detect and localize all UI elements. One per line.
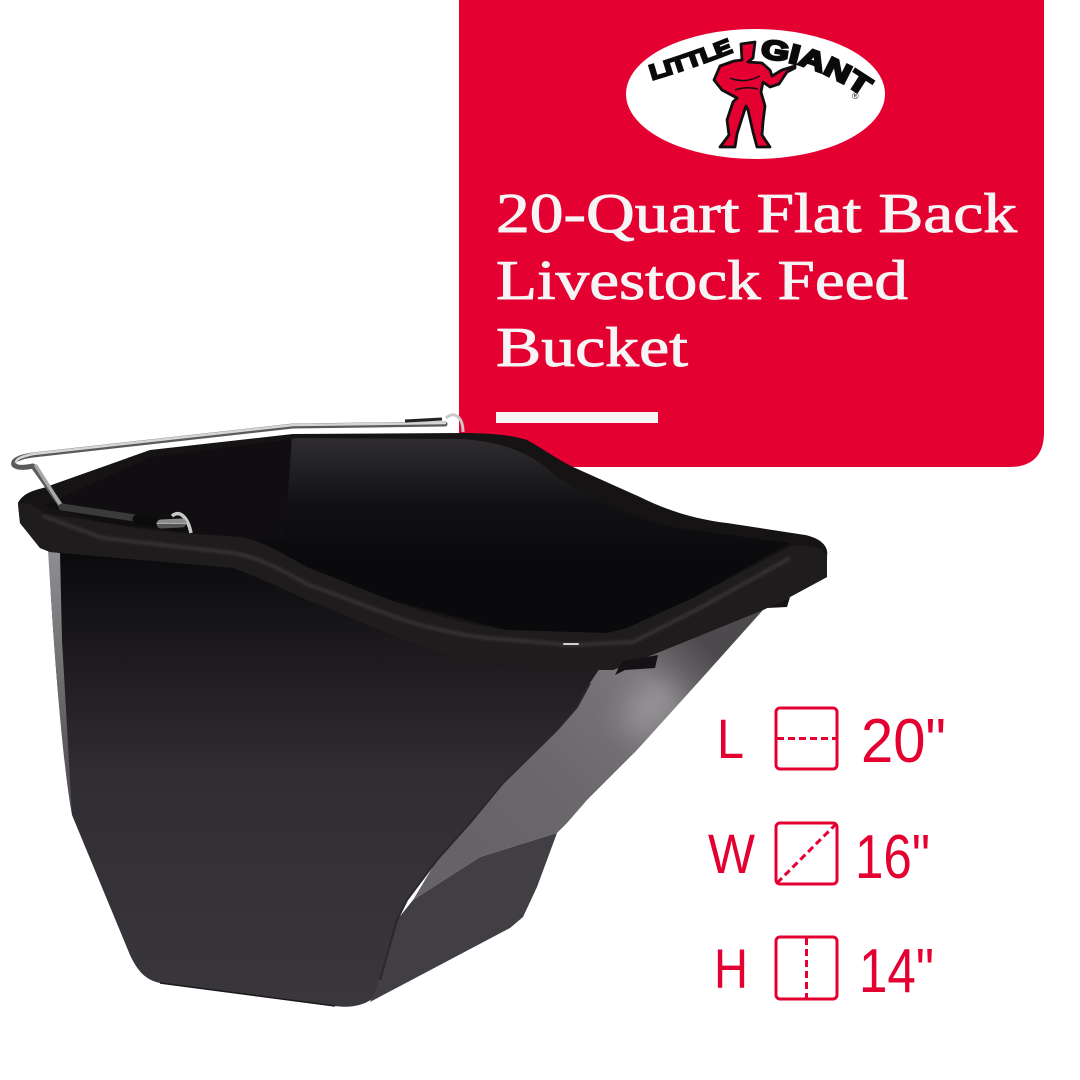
bucket interior shaded back corner — [72, 438, 292, 493]
logo wordmark: GIANT: GIANT — [761, 40, 876, 94]
logo mascot: red strongman — [714, 42, 795, 147]
bucket crease shadow — [380, 683, 590, 980]
bucket rim shadow tab — [615, 655, 658, 675]
panel: red title panel — [459, 0, 1044, 467]
handle ring near — [161, 514, 191, 533]
logo: Little Giant oval — [626, 29, 885, 159]
bucket rim right tab — [767, 597, 790, 608]
dimension: width — [708, 822, 930, 892]
product: black flat back bucket — [14, 415, 827, 1007]
value 20 inches: 20" — [861, 707, 946, 776]
wire handle — [14, 423, 445, 525]
dimension: length — [717, 707, 946, 776]
bucket left edge strip — [48, 550, 72, 815]
label L: L — [717, 707, 744, 770]
handle ring far — [405, 415, 463, 432]
bucket rim ridge highlight — [43, 516, 790, 645]
title: 20-Quart Flat Back — [496, 183, 1017, 245]
bucket rim front band — [18, 503, 827, 670]
bucket rim outer — [18, 433, 827, 670]
dimension: height — [714, 937, 934, 1006]
title: Livestock Feed — [496, 250, 908, 312]
bucket lower side facet — [370, 833, 557, 1002]
value 14 inches: 14" — [859, 937, 934, 1006]
icon: width square — [776, 823, 837, 884]
bucket front body — [48, 540, 625, 1007]
value 16 inches: 16" — [855, 823, 930, 892]
title: Bucket — [496, 317, 689, 379]
logo wordmark: LITTLE: LITTLE — [648, 38, 734, 81]
bucket side highlight — [617, 673, 683, 742]
icon: height square — [776, 937, 837, 999]
bucket lighter side facet — [413, 610, 763, 900]
bucket interior — [45, 438, 790, 633]
logo registered mark: ® — [852, 91, 859, 101]
title underline bar — [496, 412, 658, 423]
icon: length square — [776, 708, 837, 769]
label W: W — [708, 822, 755, 885]
title — [496, 183, 1017, 379]
label H: H — [714, 937, 748, 1000]
bucket rim specular — [564, 643, 578, 645]
bucket base line — [160, 983, 335, 1006]
